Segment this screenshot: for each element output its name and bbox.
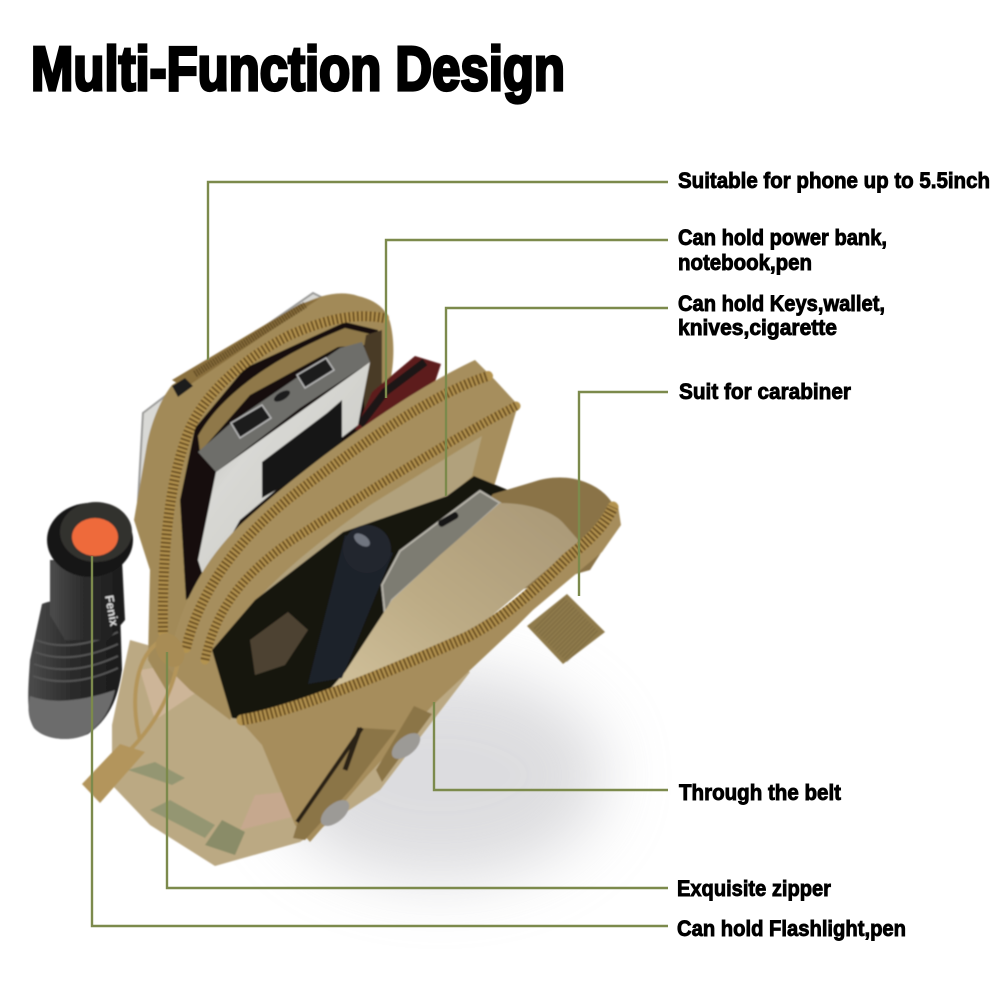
ground shadow bbox=[275, 670, 605, 880]
bank display bbox=[262, 400, 342, 498]
label: zipper: Exquisite zipper bbox=[677, 876, 831, 901]
title: Multi-Function Design bbox=[31, 35, 565, 104]
middle pocket liner bbox=[225, 436, 482, 640]
flashlight head bbox=[47, 503, 133, 577]
marker pen bbox=[308, 525, 393, 684]
belt straps bbox=[293, 706, 432, 840]
label: keys wallet: Can hold Keys,wallet, bbox=[678, 291, 885, 316]
red cards bbox=[355, 356, 441, 430]
dark interior bbox=[212, 476, 520, 722]
front pocket lower fabric bbox=[238, 506, 621, 842]
top pocket zipper bbox=[163, 316, 384, 632]
flashlight neck bbox=[50, 560, 125, 640]
webbing at top flap bbox=[172, 298, 320, 388]
label: flashlight: Can hold Flashlight,pen bbox=[677, 916, 906, 941]
middle pocket zippers bbox=[186, 376, 516, 660]
phone in front pocket bbox=[382, 491, 500, 615]
label: keys wallet: knives,cigarette bbox=[678, 315, 837, 340]
USB port right bbox=[297, 358, 334, 388]
black zipper pull stop bbox=[172, 378, 193, 397]
power bank bbox=[198, 342, 370, 582]
leader: power bank bbox=[386, 240, 668, 398]
rivet lower bbox=[316, 795, 354, 831]
flashlight bbox=[28, 502, 133, 739]
leader: carabiner bbox=[579, 392, 668, 596]
dark inner lining bbox=[362, 330, 382, 425]
label: belt: Through the belt bbox=[679, 780, 842, 805]
flashlight lower body bbox=[28, 600, 122, 739]
middle pocket fabric bbox=[168, 360, 518, 720]
label: power bank: notebook,pen bbox=[678, 250, 812, 275]
inner flap bbox=[198, 328, 370, 452]
leader: phone size bbox=[208, 182, 668, 360]
USB port left bbox=[231, 405, 271, 438]
brand text on flashlight: Fenix bbox=[102, 594, 121, 628]
top pocket interior bbox=[180, 322, 380, 600]
leader: zipper bbox=[167, 652, 668, 888]
front pocket liner bbox=[296, 503, 580, 718]
front pocket main zipper bbox=[242, 507, 613, 720]
carabiner tab bbox=[527, 594, 605, 664]
phone behind pouch bbox=[138, 293, 340, 520]
leader: keys wallet bbox=[446, 308, 668, 496]
zipper pull bbox=[82, 628, 190, 803]
phone charging port bbox=[437, 511, 460, 528]
rivet upper bbox=[387, 728, 425, 764]
label: power bank bbox=[678, 225, 887, 275]
leader: belt bbox=[434, 702, 668, 790]
micro port bbox=[272, 388, 292, 404]
label: keys wallet bbox=[678, 291, 885, 340]
top pocket fabric bbox=[134, 293, 393, 690]
camo lower body bbox=[112, 640, 470, 866]
orange lens bbox=[72, 518, 118, 556]
pouch photo illustration bbox=[28, 293, 621, 866]
tools in pocket bbox=[250, 612, 308, 675]
label: carabiner: Suit for carabiner bbox=[679, 379, 851, 404]
front pocket back lip bbox=[470, 478, 620, 590]
label: power bank: Can hold power bank, bbox=[678, 225, 887, 250]
leader: flashlight bbox=[92, 556, 668, 926]
